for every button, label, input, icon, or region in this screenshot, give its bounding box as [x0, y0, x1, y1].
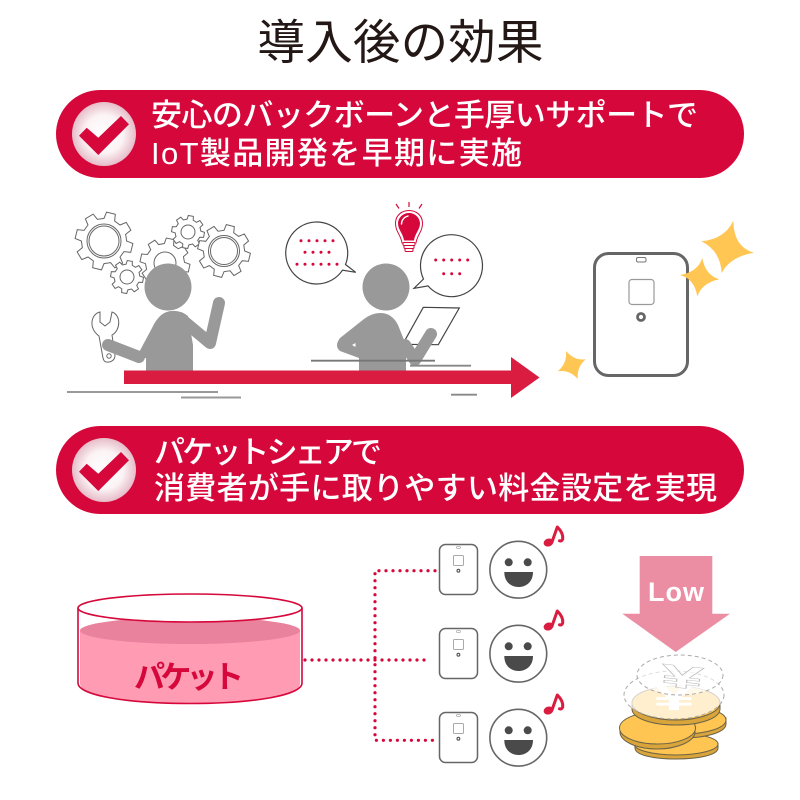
person arm	[405, 334, 431, 360]
dotted connectors	[305, 571, 435, 740]
low label: Low	[648, 577, 705, 607]
banner 1 text: 安心のバックボーンと手厚いサポートで	[151, 98, 698, 133]
banner 2 text: パケットシェアで	[154, 435, 382, 470]
figure: person with wrench	[108, 264, 219, 372]
icon: wrench	[92, 312, 119, 362]
users row 3	[440, 695, 563, 766]
icon: check badge 1	[72, 102, 136, 166]
icon: check badge 2	[72, 438, 136, 502]
icon: faded coins: ¥	[659, 657, 706, 697]
panel: banner 2	[56, 426, 744, 514]
users row 1	[440, 527, 563, 598]
speech bubble right	[414, 235, 482, 297]
floor lines left	[67, 392, 241, 398]
desk lines right	[311, 361, 477, 395]
icon: coin stack	[620, 686, 726, 759]
figure: person with tablet	[337, 264, 410, 384]
banner 2 text: 消費者が手に取りやすい料金設定を実現	[154, 471, 717, 506]
icon: large device	[594, 254, 688, 376]
icon: faded coins: ¥	[653, 676, 696, 718]
icon: sparkles	[558, 221, 754, 379]
icon: light bulb	[395, 202, 423, 252]
cylinder label: パケット	[134, 660, 244, 695]
arrow: progress	[124, 357, 540, 398]
users row 2	[440, 611, 563, 682]
illustration: gears	[69, 206, 256, 296]
speech bubble left	[286, 222, 356, 284]
panel: banner 1	[56, 90, 744, 178]
icon: low price arrow	[622, 556, 730, 652]
title: 導入後の効果	[258, 17, 544, 70]
icon: tablet	[403, 307, 459, 345]
icon: faded coins	[624, 655, 724, 719]
banner 1 text: IoT製品開発を早期に実施	[151, 136, 522, 171]
chart: packet cylinder	[78, 594, 302, 704]
